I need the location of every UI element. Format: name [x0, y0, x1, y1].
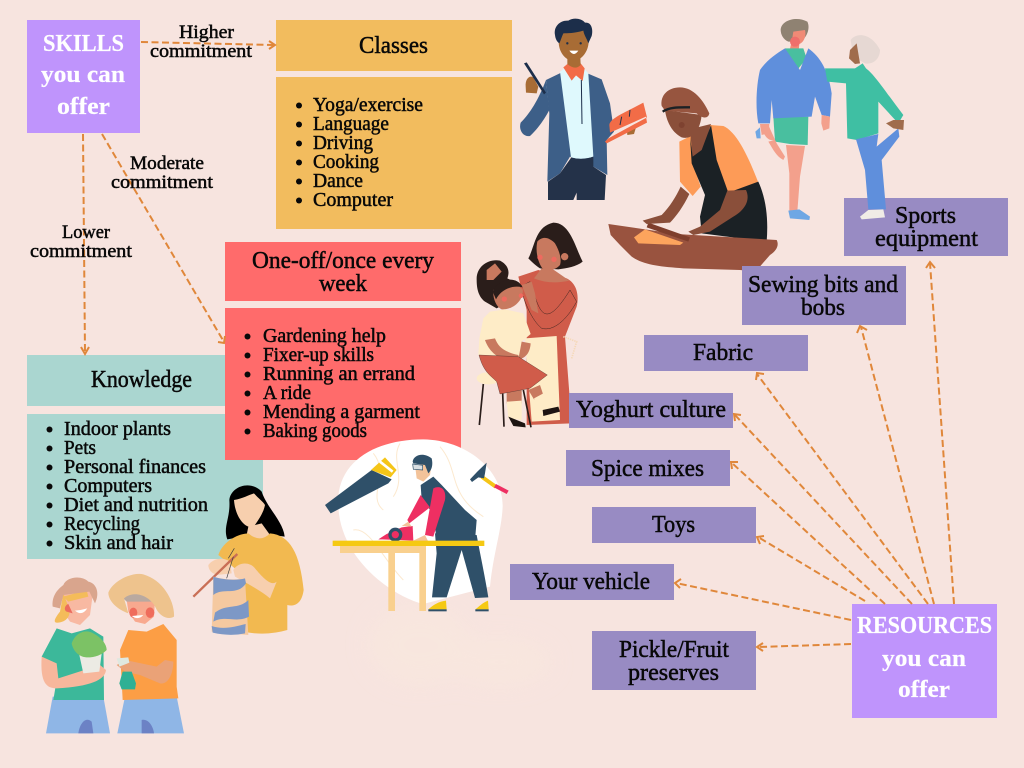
icon: carpenter at workbench	[325, 439, 509, 611]
label: moderate commitment	[111, 153, 214, 193]
panel: pickle and fruit preserves	[592, 631, 756, 690]
panel: resources you can offer: offer	[898, 677, 950, 703]
panel: yoghurt culture: Yoghurt culture	[576, 397, 726, 423]
panel: one-off heading: week	[319, 271, 367, 297]
panel: resources you can offer: RESOURCES	[857, 613, 992, 639]
panel: pickle and fruit preserves: Pickle/Fruit	[619, 637, 729, 663]
panel: one-off heading	[225, 242, 461, 301]
panel: one-off list: Mending a garment	[263, 401, 420, 423]
icon: teacher with book	[520, 19, 647, 200]
panel: fabric	[644, 335, 808, 371]
panel: knowledge heading	[27, 355, 262, 406]
arrow: to yoghurt culture	[734, 414, 912, 604]
panel: knowledge list: Diet and nutrition	[64, 494, 208, 516]
panel: knowledge list: Indoor plants	[64, 418, 171, 440]
panel: knowledge list: Personal finances	[64, 456, 206, 478]
label: lower commitment	[30, 222, 133, 262]
panel: knowledge list: Skin and hair	[64, 532, 173, 554]
icon: baker rolling dough	[608, 87, 778, 271]
panel: one-off heading: One-off/once every	[252, 248, 434, 274]
panel: skills you can offer: offer	[57, 94, 110, 120]
arrow: lower commitment	[81, 134, 89, 354]
panel: sports equipment: Sports	[895, 203, 956, 229]
icon: two gardeners	[41, 574, 184, 733]
icon: mother fixing child's hair	[477, 223, 583, 427]
panel: one-off list: Running an errand	[263, 363, 415, 385]
panel: toys: Toys	[652, 512, 695, 538]
panel: classes list: Computer	[313, 189, 393, 211]
panel: spice mixes: Spice mixes	[591, 456, 704, 482]
panel: spice mixes	[566, 450, 730, 486]
arrow: to sewing bits and bobs	[857, 326, 934, 604]
panel: your vehicle: Your vehicle	[532, 569, 650, 595]
arrow: to spice mixes	[731, 462, 885, 604]
panel: classes list: Driving	[313, 132, 373, 154]
panel: classes heading: Classes	[359, 33, 428, 59]
panel: resources you can offer	[852, 604, 997, 718]
panel: skills you can offer	[27, 20, 140, 133]
arrow: to toys	[757, 536, 865, 601]
label: higher commitment	[150, 22, 253, 62]
panel: one-off list: A ride	[263, 382, 311, 404]
panel: sports equipment: equipment	[875, 226, 978, 252]
panel: one-off list: Baking goods	[263, 420, 367, 442]
panel: one-off list: Fixer-up skills	[263, 344, 374, 366]
arrow: to pickle and fruit preserves	[757, 643, 851, 651]
panel: skills you can offer: SKILLS	[43, 31, 124, 57]
panel: classes list	[276, 77, 512, 229]
label: higher commitment: Higher	[179, 22, 235, 43]
label: lower commitment: commitment	[30, 241, 133, 262]
panel: pickle and fruit preserves: preserves	[628, 660, 719, 686]
panel: classes list: Yoga/exercise	[313, 94, 423, 116]
label: moderate commitment: Moderate	[130, 153, 204, 174]
panel: knowledge list	[27, 414, 263, 559]
label: higher commitment: commitment	[150, 41, 253, 62]
panel: sewing bits and bobs: bobs	[801, 295, 845, 321]
label: lower commitment: Lower	[62, 222, 111, 243]
panel: one-off list	[225, 308, 461, 460]
panel: sports equipment	[844, 198, 1008, 256]
panel: knowledge list: Recycling	[64, 513, 140, 535]
icon: woman knitting	[193, 485, 304, 635]
arrow: to your vehicle	[675, 579, 851, 620]
panel: classes heading	[276, 20, 512, 71]
panel: knowledge list: Computers	[64, 475, 152, 497]
panel: skills you can offer: you can	[41, 62, 125, 88]
panel: fabric: Fabric	[693, 340, 753, 366]
panel: classes list: Language	[313, 113, 389, 135]
panel: your vehicle	[510, 564, 674, 600]
panel: resources you can offer: you can	[882, 646, 966, 672]
panel: sewing bits and bobs: Sewing bits and	[748, 272, 898, 298]
arrow: to fabric	[756, 373, 928, 604]
panel: knowledge list: Pets	[64, 437, 96, 459]
arrow: to sports equipment	[926, 262, 954, 604]
panel: classes list: Cooking	[313, 151, 379, 173]
icon: two people stretching	[755, 19, 904, 220]
panel: yoghurt culture	[569, 393, 733, 428]
panel: knowledge heading: Knowledge	[91, 367, 192, 393]
label: moderate commitment: commitment	[111, 172, 214, 193]
arrow: higher commitment	[141, 41, 275, 49]
faint smudge	[370, 607, 550, 684]
panel: classes list: Dance	[313, 170, 363, 192]
arrow: moderate commitment	[102, 134, 225, 343]
panel: one-off list: Gardening help	[263, 325, 386, 347]
panel: toys	[592, 507, 756, 543]
panel: sewing bits and bobs	[742, 266, 906, 325]
